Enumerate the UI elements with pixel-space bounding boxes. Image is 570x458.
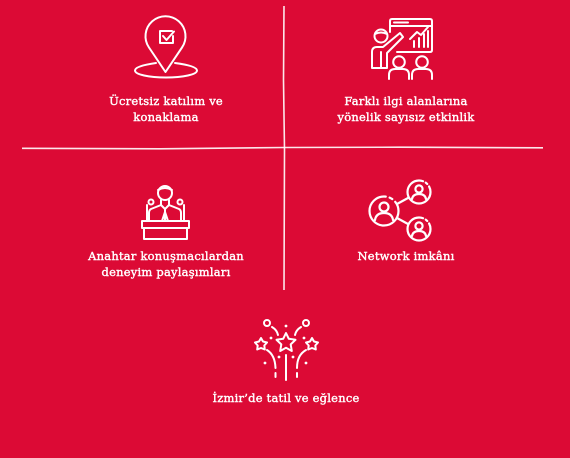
- icon: network of people: [370, 180, 430, 240]
- icon: speaker at podium: [142, 186, 189, 239]
- text: keynote speakers: [88, 249, 244, 279]
- text: free participation: konaklama: [133, 110, 199, 124]
- icon: fireworks: [255, 320, 318, 380]
- text: various events: Farklı ilgi alanlarına: [344, 94, 468, 108]
- text: various events: yönelik sayısız etkinlik: [338, 110, 474, 124]
- text: networking: Network imkânı: [358, 249, 454, 263]
- text: various events: [337, 94, 474, 124]
- text: free participation: Ücretsiz katılım ve: [109, 94, 223, 108]
- text: free participation: [109, 94, 223, 124]
- icon: location pin: [135, 16, 197, 77]
- icon: presenter with chart: [372, 19, 432, 79]
- text: keynote speakers: Anahtar konuşmacılardan: [88, 249, 244, 263]
- text: keynote speakers: deneyim paylaşımları: [102, 264, 230, 278]
- text: Izmir holiday: İzmir’de tatil ve eğlence: [212, 391, 360, 405]
